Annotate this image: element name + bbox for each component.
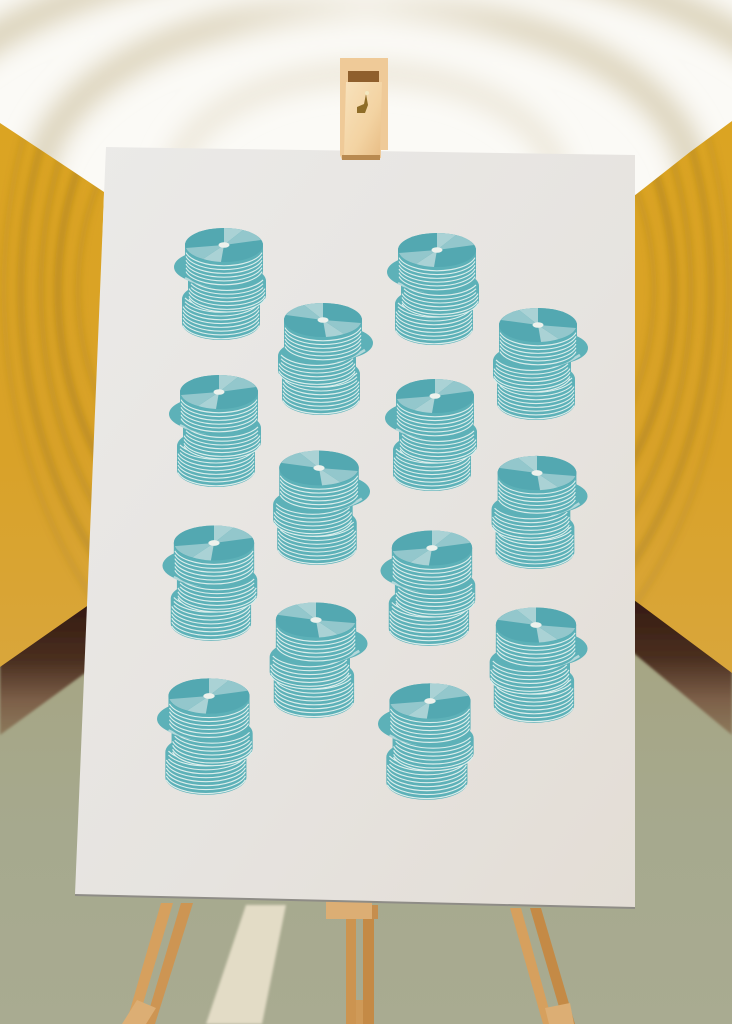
CD stack 5	[169, 375, 261, 487]
CD stack 13	[157, 678, 253, 795]
CD stack 12	[490, 607, 588, 723]
CD stack 7	[273, 451, 370, 565]
floor stripe	[206, 905, 286, 1024]
tunnel ceiling	[0, 0, 732, 430]
canvas edge shadow	[75, 891, 635, 909]
CD stack 11	[270, 602, 368, 718]
CD stack 1	[174, 228, 266, 340]
CD stack 8	[492, 456, 588, 569]
CD stack 2	[387, 233, 479, 345]
dark floor edge right	[630, 595, 732, 735]
easel leg: centre	[326, 900, 378, 1024]
CD stack 9	[162, 525, 257, 641]
CD stacks artwork	[157, 228, 588, 800]
easel leg: left	[122, 903, 193, 1024]
easel leg: right	[510, 908, 575, 1024]
canvas panel	[75, 147, 635, 907]
CD stack 4	[493, 308, 588, 420]
dark floor edge left	[0, 600, 92, 735]
CD stack 3	[278, 303, 373, 415]
CD stack 14	[378, 683, 474, 800]
CD stack 10	[380, 530, 475, 646]
CD stack 6	[385, 379, 477, 491]
yellow tunnel walls	[0, 121, 732, 673]
tunnel floor	[0, 640, 732, 1024]
easel top clamp	[340, 58, 388, 160]
